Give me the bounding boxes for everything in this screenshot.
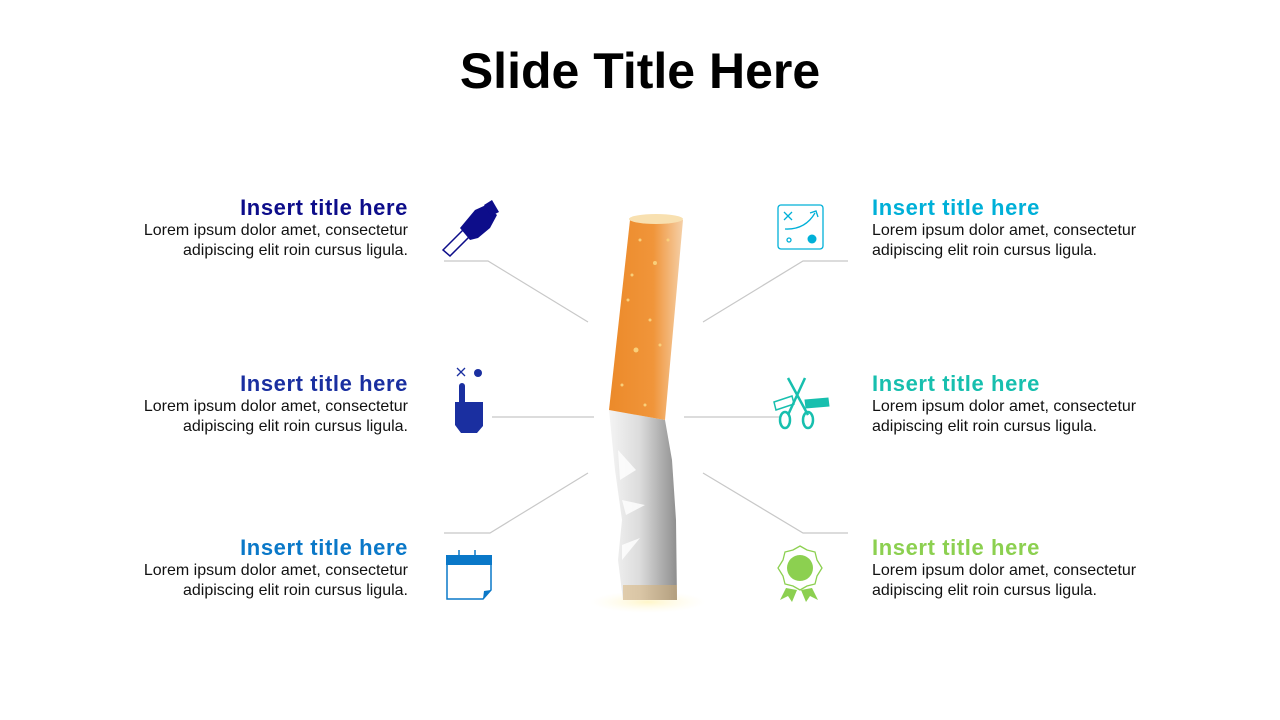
text block: right 1: adipiscing elit roin cursus ligula. bbox=[872, 242, 1097, 258]
text block: left 3 bbox=[144, 535, 408, 598]
text block: right 1: Insert title here bbox=[872, 195, 1040, 220]
text block: left 1: adipiscing elit roin cursus ligula. bbox=[183, 242, 408, 258]
text block: right 1: Lorem ipsum dolor amet, consectetur bbox=[872, 222, 1136, 239]
cigarette butt bbox=[590, 214, 706, 613]
text block: left 2: adipiscing elit roin cursus ligula. bbox=[183, 418, 408, 434]
text block: left 1: Insert title here bbox=[240, 195, 408, 220]
text block: right 3 bbox=[872, 535, 1136, 598]
icon: scissors cutting cigarette bbox=[774, 378, 829, 428]
text block: left 2 bbox=[144, 371, 408, 434]
icon: strategy board bbox=[778, 205, 823, 249]
icon: finger choice bbox=[455, 368, 483, 433]
text block: left 3: Lorem ipsum dolor amet, consectetur bbox=[144, 562, 408, 579]
text block: right 1 bbox=[872, 195, 1136, 258]
text block: left 3: adipiscing elit roin cursus ligula. bbox=[183, 582, 408, 598]
text block: right 2: Lorem ipsum dolor amet, consectetur bbox=[872, 398, 1136, 415]
text block: right 3: adipiscing elit roin cursus ligula. bbox=[872, 582, 1097, 598]
text block: right 2: Insert title here bbox=[872, 371, 1040, 396]
text block: left 1: Lorem ipsum dolor amet, consectetur bbox=[144, 222, 408, 239]
text block: right 3: Insert title here bbox=[872, 535, 1040, 560]
title: Slide Title Here bbox=[460, 43, 820, 99]
text block: left 2: Insert title here bbox=[240, 371, 408, 396]
text block: right 2: adipiscing elit roin cursus ligula. bbox=[872, 418, 1097, 434]
connector lines bbox=[444, 261, 848, 533]
icon: award badge bbox=[778, 546, 822, 602]
text block: right 3: Lorem ipsum dolor amet, consectetur bbox=[872, 562, 1136, 579]
text block: left 1 bbox=[144, 195, 408, 258]
icon: calendar bbox=[446, 550, 492, 599]
text block: left 2: Lorem ipsum dolor amet, consectetur bbox=[144, 398, 408, 415]
icon: hand with cigarette bbox=[443, 200, 499, 256]
text block: right 2 bbox=[872, 371, 1136, 434]
text block: left 3: Insert title here bbox=[240, 535, 408, 560]
